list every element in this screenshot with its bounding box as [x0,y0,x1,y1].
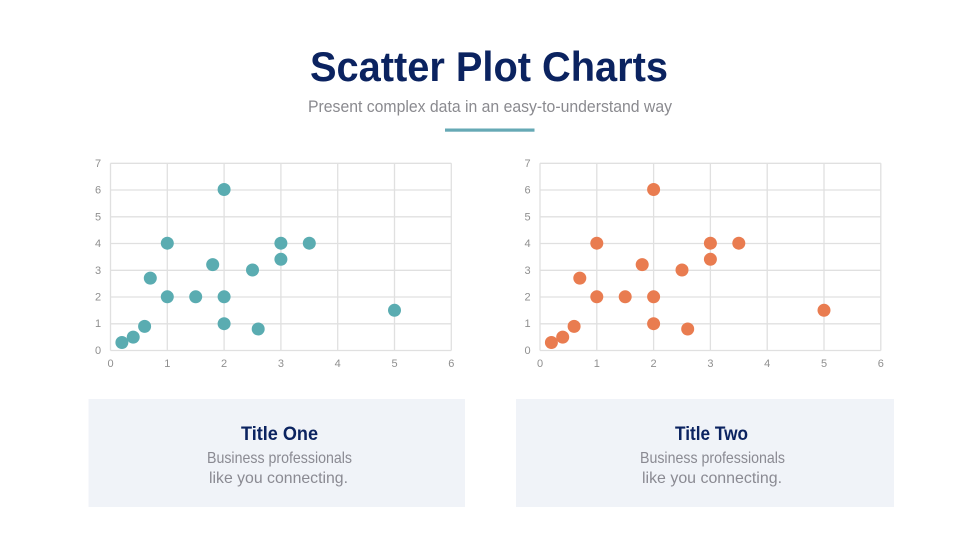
title: Scatter Plot Charts [310,43,668,90]
x axis labels: 4 [764,358,770,370]
y axis labels: 6 [524,184,531,196]
teal data points [115,183,401,349]
y axis labels: 7 [524,158,531,170]
y axis labels: 7 [95,158,101,170]
y axis labels: 1 [524,318,531,330]
x axis labels: 3 [707,358,713,370]
y axis labels: 4 [524,238,531,250]
text: description one: Business professionals [207,450,352,467]
x axis labels: 3 [278,358,284,370]
y axis labels: 6 [95,184,101,196]
x axis labels: 6 [448,358,454,370]
text: description one: like you connecting. [209,470,348,487]
x axis labels: 0 [107,358,114,370]
orange data points [545,183,830,349]
heading: title one: Title One [241,424,318,445]
heading: title two: Title Two [675,424,748,445]
x axis labels: 0 [537,358,543,370]
x axis labels: 2 [221,358,227,370]
panel: title one [88,399,465,507]
y axis labels: 1 [95,318,101,330]
y axis labels: 2 [524,292,531,304]
text: description two [640,450,785,487]
text: description one [207,450,352,487]
x axis labels [107,358,454,370]
x axis labels: 1 [594,358,600,370]
y axis labels: 5 [95,212,101,224]
y axis labels: 2 [95,292,101,304]
y axis labels: 3 [95,265,101,277]
y axis labels [524,158,531,357]
accent bar [445,128,534,132]
y axis labels: 4 [95,238,101,250]
y axis labels: 0 [95,345,101,357]
y axis labels: 5 [524,212,531,224]
text: description two: like you connecting. [642,470,782,487]
chart: teal scatter plot [95,158,454,370]
y axis labels [95,158,101,357]
x axis labels [537,358,884,370]
x axis labels: 6 [878,358,884,370]
chart: orange scatter plot [524,158,884,370]
x axis labels: 1 [164,358,170,370]
text: description two: Business professionals [640,450,785,467]
y axis labels: 3 [524,265,531,277]
y axis labels: 0 [524,345,531,357]
panel: title two [516,399,894,507]
subtitle: Present complex data in an easy-to-understand way [308,97,672,116]
x axis labels: 5 [391,358,398,370]
x axis labels: 2 [651,358,657,370]
x axis labels: 5 [821,358,827,370]
x axis labels: 4 [335,358,341,370]
